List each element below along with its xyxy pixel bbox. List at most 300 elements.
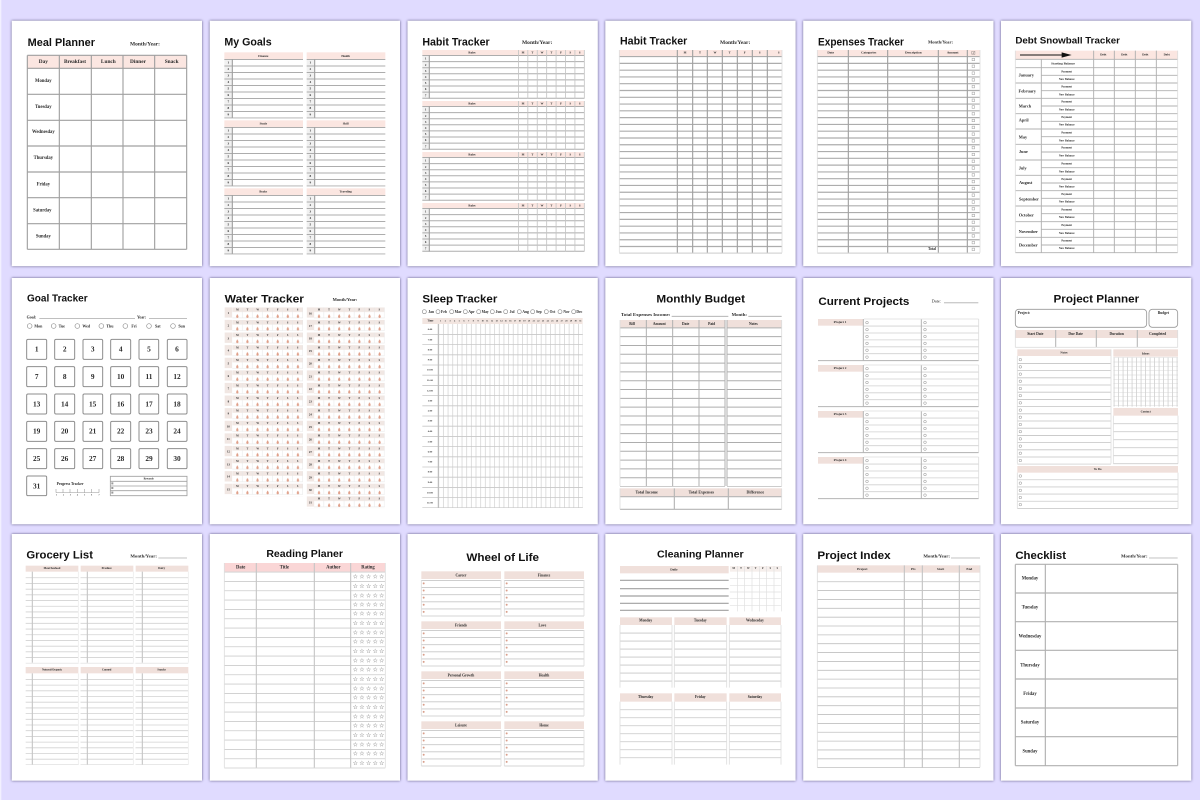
water grid days 1-15: 4 <box>228 349 230 353</box>
totals table <box>620 488 782 509</box>
debt table: New Balance <box>1059 246 1075 250</box>
sleep grid: 2 <box>445 321 446 323</box>
to do list: To Do <box>1094 467 1102 471</box>
sleep grid: 6:00 <box>428 450 433 453</box>
budget box: Budget <box>1158 311 1170 315</box>
sleep grid: 9:00 <box>428 481 433 484</box>
totals table: Total Income <box>636 489 658 494</box>
month/year field: Month/Year: <box>130 553 157 558</box>
numbered day boxes: 7 <box>35 372 39 381</box>
star ratings: ☆☆☆☆☆ <box>353 648 386 655</box>
lower lists: Canned <box>102 667 112 671</box>
debt table: Payment <box>1061 177 1072 181</box>
title: Sleep Tracker: Sleep Tracker <box>422 294 497 306</box>
sleep grid: 10 <box>482 321 484 323</box>
month/year field <box>130 553 187 558</box>
title: Wheel of Life: Wheel of Life <box>466 552 539 564</box>
meal table: Lunch <box>101 59 116 65</box>
monday to wednesday: Wednesday <box>746 619 764 623</box>
water grid days 16-31: 22 <box>309 387 312 391</box>
star ratings: ☆☆☆☆☆ <box>353 592 386 599</box>
numbered day boxes: 16 <box>117 399 125 408</box>
goal lists: 123456789 <box>309 61 311 117</box>
to do list <box>1017 466 1178 509</box>
water grid days 1-15: MTWTFSS <box>236 460 299 463</box>
water grid days 1-15: MTWTFSS <box>236 372 299 375</box>
water grid days 1-15: 15 <box>227 487 230 491</box>
sleep grid: 6:00 <box>428 328 433 331</box>
sleep grid: 3:00 <box>428 420 433 423</box>
expenses table <box>817 50 980 253</box>
water grid days 16-31: 26 <box>309 437 312 441</box>
debt table: Starting Balance <box>1051 61 1075 65</box>
meal table: Sunday <box>36 234 52 239</box>
expenses table: Total <box>928 247 936 251</box>
sleep grid: 11:00 <box>427 501 434 504</box>
debt table: February <box>1019 88 1037 93</box>
month selectors: Mar <box>455 310 462 314</box>
goal and year fields: Goal: <box>27 314 36 319</box>
sleep grid: 30 <box>575 321 577 323</box>
debt table: June <box>1019 149 1028 154</box>
month/year label: Month/Year: <box>333 297 357 302</box>
title: Reading Planer: Reading Planer <box>266 549 343 560</box>
numbered day boxes: 2 <box>63 345 67 354</box>
panel: expenses tracker <box>803 21 994 266</box>
sleep grid: 7 <box>468 321 470 323</box>
title: Goal Tracker: Goal Tracker <box>27 293 88 304</box>
debt table: New Balance <box>1059 122 1075 126</box>
title: Project Index: Project Index <box>817 550 892 562</box>
debt table: Payment <box>1061 100 1072 104</box>
panel: reading planer <box>210 534 400 781</box>
checklist table: Friday <box>1023 692 1037 697</box>
water grid days 1-15: 8 <box>228 399 230 403</box>
title: Monthly Budget: Monthly Budget <box>656 294 745 306</box>
index table <box>817 565 980 768</box>
progress tracker: Progress Tracker <box>57 482 84 486</box>
sleep grid: 22 <box>537 321 539 323</box>
numbered day boxes: 1 <box>35 345 39 354</box>
month selectors: May <box>482 310 489 314</box>
goal lists: Books <box>259 189 268 193</box>
index table: Project <box>857 567 868 571</box>
ideas grid: Ideas <box>1142 352 1150 356</box>
water grid days 1-15: MTWTFSS <box>236 397 299 400</box>
water grid days 16-31: MTWTFSS <box>318 397 381 400</box>
project 3 <box>818 411 979 453</box>
project 4 <box>818 457 979 499</box>
numbered day boxes: 6 <box>175 345 179 354</box>
sleep grid: 16 <box>509 321 512 323</box>
weekday selectors: Sun <box>178 323 186 328</box>
water grid days 1-15: MTWTFSS <box>236 485 299 488</box>
goal lists: 123456789 <box>309 197 311 253</box>
numbered day boxes: 24 <box>173 427 181 436</box>
numbered day boxes: 18 <box>173 399 181 408</box>
water grid days 1-15: 14 <box>227 475 230 479</box>
water grid days 1-15: MTWTFSS <box>236 447 299 450</box>
panel: project planner <box>1001 278 1191 524</box>
month selectors: Sep <box>536 310 542 314</box>
bills table: Paid <box>708 322 715 326</box>
index table: PG <box>911 567 916 571</box>
month/year field <box>1121 553 1178 558</box>
water grid days 16-31: MTWTFSS <box>318 372 381 375</box>
debt table: New Balance <box>1059 231 1075 235</box>
checklist table: Saturday <box>1021 721 1040 726</box>
star ratings: ☆☆☆☆☆ <box>353 574 386 581</box>
title: Meal Planner: Meal Planner <box>28 37 95 49</box>
star ratings <box>353 574 386 767</box>
star ratings: ☆☆☆☆☆ <box>353 695 386 702</box>
budget box <box>1149 309 1178 327</box>
star ratings: ☆☆☆☆☆ <box>353 639 386 646</box>
sleep grid: Time <box>427 320 434 323</box>
weekday selectors: Thu <box>106 323 114 328</box>
numbered day boxes: 22 <box>117 427 125 436</box>
habit blocks: MTWTFSS <box>522 101 581 105</box>
sleep grid: 28 <box>565 321 567 323</box>
sleep grid: 25 <box>551 321 553 323</box>
month selectors: Nov <box>563 310 570 314</box>
water grid days 16-31: 25 <box>309 425 312 429</box>
star ratings: ☆☆☆☆☆ <box>353 657 386 664</box>
income and month fields <box>621 312 782 317</box>
reading table: Rating <box>361 565 375 570</box>
meal table: Dinner <box>130 59 147 65</box>
life area lists: Friends <box>455 623 468 627</box>
month selectors: Feb <box>441 310 447 314</box>
bills table: Bill <box>629 322 635 326</box>
life area lists: Personal Growth <box>448 673 474 677</box>
life area lists: Health <box>539 673 549 677</box>
monday to wednesday <box>620 617 781 688</box>
debt table: April <box>1019 118 1029 123</box>
dates table <box>1015 330 1178 347</box>
water grid days 16-31: 21 <box>309 374 312 378</box>
debt table: Payment <box>1061 238 1072 242</box>
weekly check grid: MTWTFSS <box>732 567 779 570</box>
star ratings: ☆☆☆☆☆ <box>353 723 386 730</box>
month/year label: Month/Year: <box>928 40 953 45</box>
weekly check grid <box>730 566 782 612</box>
star ratings: ☆☆☆☆☆ <box>353 704 386 711</box>
numbered day boxes: 13 <box>33 399 41 408</box>
numbered day boxes: 19 <box>33 427 41 436</box>
star ratings: ☆☆☆☆☆ <box>353 713 386 720</box>
water grid days 16-31: 19 <box>309 349 312 353</box>
numbered day boxes: 27 <box>89 454 97 463</box>
water grid days 16-31: MTWTFSS <box>318 346 381 349</box>
checklist table: Monday <box>1022 577 1039 582</box>
month/year label: Month/Year: <box>522 41 553 46</box>
sleep grid: 14 <box>500 321 503 323</box>
panel: goal tracker <box>12 278 202 524</box>
checklist table: Sunday <box>1022 750 1038 755</box>
reading table: Title <box>280 566 289 571</box>
star ratings: ☆☆☆☆☆ <box>353 676 386 683</box>
water grid days 1-15: 7 <box>228 387 230 391</box>
bills table <box>620 320 782 487</box>
expenses table: Description <box>905 51 922 55</box>
month/year label: Month/Year: <box>720 41 751 46</box>
debt table: January <box>1019 72 1035 77</box>
water grid days 16-31: 23 <box>309 400 312 404</box>
water grid days 1-15: 5 <box>228 361 230 365</box>
water grid days 16-31: 31 <box>309 501 312 505</box>
progress tracker: 1234567 <box>56 495 99 497</box>
goal lists: Study <box>260 121 268 125</box>
sleep grid: 9:00 <box>428 359 433 362</box>
daily list <box>620 566 729 610</box>
habit blocks: Rules <box>468 203 476 207</box>
water grid days 16-31: 18 <box>309 337 312 341</box>
numbered day boxes: 23 <box>145 427 153 436</box>
weekday selectors: Tue <box>59 323 65 328</box>
habit blocks: 1234567 <box>425 108 427 148</box>
water grid days 16-31: MTWTFSS <box>318 485 381 488</box>
expenses table: Date <box>827 51 835 55</box>
numbered day boxes: 25 <box>33 454 41 463</box>
debt table: New Balance <box>1059 77 1075 81</box>
water grid days 1-15: MTWTFSS <box>236 334 299 337</box>
water grid days 16-31: MTWTFSS <box>318 309 381 312</box>
panel: sleep tracker <box>408 278 598 524</box>
dates table: Due Date <box>1068 332 1083 336</box>
meal table: Thursday <box>34 156 54 161</box>
star ratings: ☆☆☆☆☆ <box>353 620 386 627</box>
star ratings: ☆☆☆☆☆ <box>353 602 386 609</box>
ideas grid <box>1113 349 1178 407</box>
sleep grid: 11:00 <box>427 379 434 382</box>
numbered day boxes: 26 <box>61 454 69 463</box>
month/year label: Month/Year: <box>130 42 160 47</box>
sleep grid: 5:00 <box>428 440 433 443</box>
month/year field <box>923 553 980 558</box>
water grid days 16-31: 16 <box>309 311 312 315</box>
numbered day boxes: 14 <box>61 399 69 408</box>
habit grid: MTWTFSS <box>684 51 780 55</box>
checklist table: Wednesday <box>1019 634 1042 639</box>
habit blocks: 1234567 <box>425 57 427 97</box>
goal lists <box>224 52 385 254</box>
goal lists: Finance <box>258 54 269 58</box>
project 3: Project 3 <box>834 412 847 416</box>
goal lists: Traveling <box>340 189 352 193</box>
totals table: Difference <box>747 490 764 495</box>
sleep grid: 1 <box>440 321 441 323</box>
sleep grid: 7:00 <box>428 338 433 341</box>
title: Grocery List: Grocery List <box>26 550 93 562</box>
sleep grid: 8 <box>473 321 474 323</box>
project 2: Project 2 <box>834 366 847 370</box>
panel: water tracker <box>210 278 400 524</box>
water grid days 1-15: 11 <box>227 437 230 441</box>
water grid days 1-15: 1 <box>228 311 230 315</box>
star ratings: ☆☆☆☆☆ <box>353 760 386 767</box>
checklist table: Tuesday <box>1022 605 1039 610</box>
water grid days 16-31: MTWTFSS <box>318 359 381 362</box>
panel: checklist <box>1001 534 1191 781</box>
month selectors: Oct <box>550 310 556 314</box>
sleep grid: 17 <box>514 321 517 323</box>
water grid days 1-15: 9 <box>228 412 230 416</box>
sleep grid: 4 <box>454 321 456 323</box>
water grid days 1-15: MTWTFSS <box>236 384 299 387</box>
panel: cleaning planner <box>605 534 796 781</box>
habit grid <box>619 50 782 253</box>
notes list <box>1017 349 1111 464</box>
date field <box>932 298 978 303</box>
water grid days 16-31: 17 <box>309 324 312 328</box>
water grid days 16-31: MTWTFSS <box>318 422 381 425</box>
debt table: Payment <box>1061 162 1072 166</box>
icon: arrow <box>1020 52 1072 58</box>
sleep grid: 31 <box>579 321 581 323</box>
water grid days 16-31: 20 <box>309 362 312 366</box>
rewards box <box>110 476 187 496</box>
panel: grocery list <box>12 534 202 781</box>
debt table <box>1015 51 1178 253</box>
goal and year fields <box>27 314 187 319</box>
sleep grid: 12:00 <box>427 389 434 392</box>
sleep grid: 1:00 <box>428 399 433 402</box>
weekday selectors <box>27 323 186 328</box>
dates table: Duration <box>1110 332 1124 336</box>
panel: wheel of life <box>408 534 598 781</box>
project box <box>1015 309 1147 327</box>
meal table: Tuesday <box>35 105 52 110</box>
sleep grid: 19 <box>523 321 525 323</box>
month selectors: Aug <box>522 310 529 314</box>
panel: project index <box>803 534 994 781</box>
income and month fields: Month: <box>732 312 748 317</box>
numbered day boxes: 10 <box>117 372 125 381</box>
title: Habit Tracker: Habit Tracker <box>422 36 490 48</box>
title: Project Planner: Project Planner <box>1053 294 1139 306</box>
debt table: Payment <box>1061 223 1072 227</box>
sleep grid: 27 <box>561 321 564 323</box>
panel: meal planner <box>12 21 202 266</box>
goal lists: 123456789 <box>227 129 229 185</box>
panel: habit tracker with rules <box>408 21 598 266</box>
debt table: New Balance <box>1059 200 1075 204</box>
month selectors: Jan <box>428 310 434 314</box>
water grid days 1-15: 13 <box>227 462 230 466</box>
debt table: New Balance <box>1059 169 1075 173</box>
numbered day boxes: 20 <box>61 427 69 436</box>
weekday selectors: Sat <box>155 323 161 328</box>
title: Debt Snowball Tracker: Debt Snowball Tracker <box>1015 35 1120 45</box>
reading table: Date <box>236 566 245 571</box>
month/year field: Month/Year: <box>1121 553 1148 558</box>
habit blocks: 1234567 <box>425 210 427 250</box>
debt table: Debt <box>1142 53 1148 57</box>
water grid days 16-31: 30 <box>309 488 312 492</box>
upper lists: Dairy <box>158 566 166 570</box>
sleep grid: 11 <box>486 321 488 323</box>
goal lists: Health <box>341 54 350 58</box>
checklist table: Thursday <box>1020 663 1040 668</box>
month selectors: Jun <box>496 310 502 314</box>
habit blocks: Rules <box>468 50 476 54</box>
numbered day boxes: 17 <box>145 399 153 408</box>
title: Water Tracker: Water Tracker <box>225 294 305 306</box>
water grid days 1-15: 10 <box>227 424 230 428</box>
water grid days 1-15: MTWTFSS <box>236 472 299 475</box>
project 1 <box>818 319 979 361</box>
goal and year fields: Year: <box>137 314 146 319</box>
debt table: September <box>1019 196 1039 201</box>
panel: habit tracker blank <box>605 21 796 266</box>
meal table: Saturday <box>33 208 52 213</box>
project 4: Project 4 <box>834 458 847 462</box>
sleep grid: 18 <box>519 321 521 323</box>
panel: monthly budget <box>605 278 796 524</box>
rewards box: Rewards <box>144 478 154 481</box>
bills table: Notes <box>749 322 758 326</box>
debt table: New Balance <box>1059 185 1075 189</box>
debt table: July <box>1019 165 1027 170</box>
water grid days 16-31: MTWTFSS <box>318 409 381 412</box>
water grid days 1-15: MTWTFSS <box>236 409 299 412</box>
water grid days 16-31: MTWTFSS <box>318 472 381 475</box>
sleep grid: 12 <box>491 321 493 323</box>
goal lists: 123456789 <box>309 129 311 185</box>
numbered day boxes: 4 <box>119 345 123 354</box>
month selectors: Dec <box>576 310 583 314</box>
debt table: May <box>1019 134 1028 139</box>
sleep grid: 3 <box>449 321 451 323</box>
debt table: New Balance <box>1059 92 1075 96</box>
water grid days 1-15: MTWTFSS <box>236 321 299 324</box>
index table: Start <box>937 567 945 571</box>
index table: End <box>966 567 972 571</box>
habit blocks: MTWTFSS <box>522 152 581 156</box>
meal table: Breakfast <box>64 59 86 65</box>
lower lists: Natural/Organic <box>42 667 63 671</box>
weekday selectors: Mon <box>34 323 43 328</box>
meal table: Friday <box>37 182 51 187</box>
numbered day boxes: 30 <box>173 454 181 463</box>
debt table: Debt <box>1100 53 1106 57</box>
star ratings: ☆☆☆☆☆ <box>353 685 386 692</box>
sleep grid: 9 <box>477 321 479 323</box>
project 2 <box>818 365 979 407</box>
water grid days 1-15: MTWTFSS <box>236 359 299 362</box>
expenses table: Amount <box>947 51 959 55</box>
date field: Date: <box>932 298 941 303</box>
sleep grid: 20 <box>528 321 530 323</box>
sleep grid <box>422 318 583 508</box>
numbered day boxes: 28 <box>117 454 125 463</box>
sleep grid: 21 <box>533 321 535 323</box>
habit blocks: Rules <box>468 101 476 105</box>
panel: current projects <box>803 278 994 524</box>
water grid days 16-31: 28 <box>309 463 312 467</box>
sleep grid: 10:00 <box>427 491 434 494</box>
water grid days 16-31: 24 <box>309 412 312 416</box>
title: Cleaning Planner: Cleaning Planner <box>657 549 744 560</box>
sleep grid: 23 <box>542 321 544 323</box>
water grid days 1-15 <box>227 307 303 496</box>
upper lists: Meat/Seafood <box>44 566 61 570</box>
expenses table: Categories <box>861 51 877 55</box>
numbered day boxes <box>27 339 187 496</box>
water grid days 1-15: MTWTFSS <box>236 309 299 312</box>
sleep grid: 10:00 <box>427 369 434 372</box>
